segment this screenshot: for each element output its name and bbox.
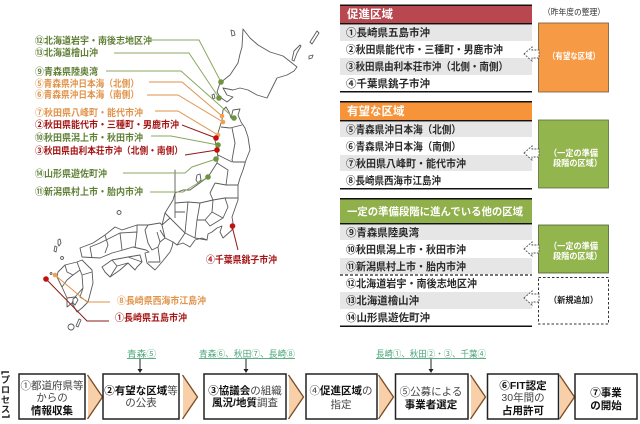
callout: 青森⑤ [127,348,156,373]
map labels: ⑫北海道岩宇・南後志地区沖 [35,35,152,47]
process step 6: 占用許可 [502,404,544,417]
process arrow [560,375,574,419]
box: previous preparation area 2: 段階の区域） [553,250,602,261]
arrows: dashed left arrows [524,47,539,305]
process step 1 [19,374,85,419]
box: previous preparation area 1 [538,120,608,188]
callout: 青森⑥、秋田⑦、長崎⑧: 青森⑥、秋田⑦、長崎⑧ [199,348,295,359]
map labels: ⑭山形県遊佐町沖 [35,168,107,180]
Honshu [80,107,250,270]
panel: 一定の準備段階: ⑭山形県遊佐町沖 [346,311,430,324]
header [340,198,532,224]
panel: 促進区域 [340,4,532,92]
header: 一定の準備段階に進んでいる他の区域 [347,205,523,218]
map labels: ④千葉県銚子市沖 [206,254,277,266]
label: process: ス [1,404,10,414]
heading: previous-year note: （昨年度の整理） [543,7,605,17]
box: previous preparation area 1: 段階の区域） [553,157,602,168]
orange leaders [55,82,223,302]
process arrow [182,375,198,419]
process step 6: 30年間の [501,391,545,404]
process step 6: ⑥FIT認定 [499,380,547,392]
process step 2 [103,374,179,419]
callout: 青森⑥、秋田⑦、長崎⑧ [199,348,295,373]
label: process [1,372,10,417]
process step 1: からの [36,392,68,404]
label: process: プ [1,375,10,385]
panel: 一定の準備段階 [340,198,532,327]
panel: 促進区域: ②秋田県能代市・三種町・男鹿市沖 [346,43,503,56]
panel: 一定の準備段階: ⑩秋田県潟上市・秋田市沖 [346,243,466,256]
map labels: ⑩秋田県潟上市・秋田市沖 [35,132,143,144]
panel: 有望な区域: ⑤青森県沖日本海（北側） [346,123,461,136]
process step 7: ⑦事業 [590,386,622,399]
red leaders [46,125,238,321]
map labels: ⑧長崎県西海市江島沖 [117,295,206,307]
map labels [35,35,277,324]
Shikoku [102,255,142,277]
map labels: ⑬北海道檜山沖 [35,47,98,59]
panel: 促進区域: ③秋田県由利本荘市沖（北側・南側） [346,60,508,73]
panel: 一定の準備段階: ⑬北海道檜山沖 [346,294,419,307]
Hokkaido [217,29,297,102]
box: previous promising area [538,23,608,92]
process step 7: の開始 [590,399,622,412]
header [340,101,532,122]
header [340,4,532,24]
box: previous preparation area 2: （一定の準備 [549,240,598,251]
panel: 有望な区域: ⑦秋田県八峰町・能代市沖 [346,157,466,170]
callout: 長崎①、秋田②・③、千葉④ [376,348,486,373]
box: previous promising area: （有望な区域） [548,50,600,61]
box: previous preparation area 2 [538,225,608,273]
map labels: ②秋田県能代市・三種町・男鹿市沖 [35,119,179,131]
process step 3: ③協議会の組織 [208,384,282,397]
process step 1: ①都道府県等 [20,379,84,392]
header: 有望な区域 [347,104,405,118]
panel: 有望な区域: ⑧長崎県西海市江島沖 [346,174,441,187]
map labels: ①長崎県五島市沖 [115,312,187,324]
callout: 長崎①、秋田②・③、千葉④: 長崎①、秋田②・③、千葉④ [376,348,486,359]
process step 5: 事業者選定 [405,398,458,411]
map labels: ③秋田県由利本荘市沖（北側・南側） [35,145,183,157]
map of Japan [50,29,319,330]
header: 促進区域 [347,7,393,21]
process step 3: 風況/地質調査 [212,396,278,409]
process step 1: 情報収集 [31,404,73,417]
Kyushu [57,260,93,312]
process step 5 [396,374,468,419]
map labels: ⑥青森県沖日本海（南側） [35,89,139,101]
panel: 促進区域: ④千葉県銚子市沖 [346,77,430,90]
process step 4: 指定 [330,398,352,411]
box: previous preparation area 1: （一定の準備 [549,147,598,158]
green leaders [106,40,234,192]
process step 7 [575,374,637,419]
panel: 有望な区域 [340,101,532,190]
map labels: ⑤青森県沖日本海（北側） [35,78,139,90]
process arrow [288,375,304,419]
site markers [43,79,237,282]
prefecture borders [62,125,245,303]
panel: 有望な区域: ⑥青森県沖日本海（南側） [346,140,461,153]
map labels: ⑨青森県陸奥湾 [35,66,98,78]
process arrow [470,375,486,419]
panel: 一定の準備段階: ⑨青森県陸奥湾 [346,226,419,239]
process arrow [378,375,394,419]
process arrow [88,375,102,419]
process step 5: ⑤公募による [400,385,462,398]
process step 3 [204,374,286,419]
box: newly added: （新規追加） [549,294,598,305]
process step 4: ④促進区域の [310,384,372,397]
panel: 一定の準備段階: ⑪新潟県村上市・胎内市沖 [346,260,466,273]
process step 2: ②有望な区域等 [104,384,178,397]
process step 6 [488,374,558,419]
label: process: ロ [1,385,10,395]
process step 4 [306,374,377,419]
box: newly added [538,278,608,324]
map labels: ⑪新潟県村上市・胎内市沖 [35,186,143,198]
callout: 青森⑤: 青森⑤ [127,348,156,359]
leader lines [46,40,238,321]
panel: 促進区域: ①長崎県五島市沖 [346,26,430,39]
process step 2: の公表 [125,397,157,409]
islands [50,30,319,330]
label: process: セ [1,395,10,405]
map labels: ⑦秋田県八峰町・能代市沖 [35,107,143,119]
panel: 一定の準備段階: ⑫北海道岩宇・南後志地区沖 [346,277,477,290]
